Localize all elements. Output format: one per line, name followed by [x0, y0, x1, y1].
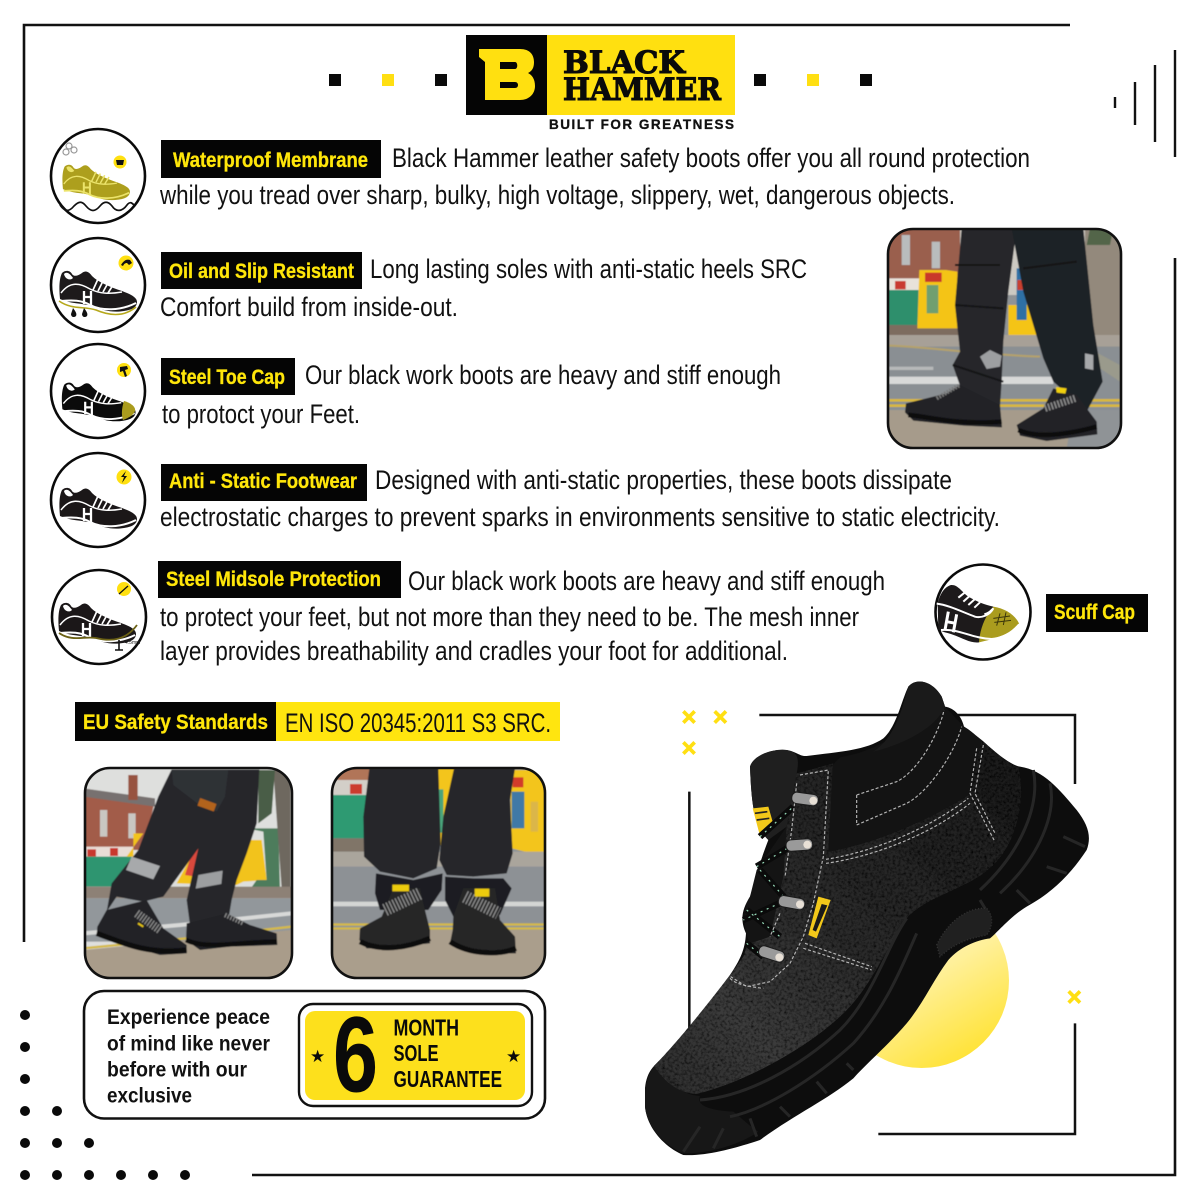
guarantee message: of mind like never: [107, 1032, 271, 1056]
guarantee panel: [84, 991, 545, 1118]
icon: steel toe shoe: [51, 344, 145, 438]
guarantee message: Experience peace: [107, 1005, 270, 1029]
product photo: black safety boot: [645, 681, 1089, 1155]
logo: Black Hammer: BLACK: [563, 45, 686, 81]
description: [160, 254, 807, 322]
label: [161, 140, 381, 178]
icon: scuff cap shoe: [936, 564, 1030, 660]
header squares: [329, 74, 872, 86]
icon: steel midsole shoe: 4.5mm: [125, 640, 140, 646]
boot frame lines: [689, 715, 1075, 1134]
description: electrostatic charges to prevent sparks in environments sensitive to static electricity.: [160, 502, 1000, 532]
description: [160, 566, 885, 666]
EU safety standards banner: EU Safety Standards: [83, 711, 268, 734]
photo: worker legs and boots, top right: [887, 228, 1123, 452]
EU safety standards banner: EN ISO 20345:2011 S3 SRC.: [285, 708, 551, 738]
badge: 6 month sole guarantee: MONTH: [394, 1014, 459, 1040]
badge: 6 month sole guarantee: SOLE: [394, 1040, 438, 1066]
badge: 6 month sole guarantee: ★: [506, 1047, 521, 1067]
label: Oil and Slip Resistant: [169, 260, 354, 283]
label: Scuff Cap: [1054, 601, 1135, 624]
logo: Black Hammer: [466, 35, 735, 132]
description: Long lasting soles with anti-static heels SRC: [370, 254, 807, 284]
badge: 6 month sole guarantee: [299, 994, 532, 1114]
photo: front view of boots: [330, 765, 547, 982]
EU safety standards banner: [75, 702, 560, 741]
description: Our black work boots are heavy and stiff enough: [305, 360, 781, 390]
feature: Steel Toe Cap: [51, 344, 781, 438]
description: [159, 143, 1030, 210]
description: Designed with anti-static properties, these boots dissipate: [375, 465, 952, 495]
description: Black Hammer leather safety boots offer you all round protection: [392, 143, 1030, 173]
guarantee message: [107, 1005, 271, 1108]
badge: 6 month sole guarantee: ★: [310, 1047, 325, 1067]
description: to protoct your Feet.: [162, 399, 360, 429]
logo mark: B: [479, 49, 535, 100]
description: Our black work boots are heavy and stiff enough: [408, 566, 885, 596]
description: Comfort build from inside-out.: [160, 292, 458, 322]
label: [1046, 594, 1148, 632]
yellow cross marks: [683, 711, 1080, 1003]
yellow circle: [834, 893, 1009, 1068]
icon: waterproof shoe: [51, 129, 145, 223]
badge: 6 month sole guarantee: GUARANTEE: [394, 1066, 502, 1092]
description: layer provides breathability and cradles your foot for additional.: [160, 636, 788, 666]
icon: steel midsole shoe: [52, 570, 146, 664]
label: Waterproof Membrane: [173, 149, 368, 172]
icon: anti-static shoe: [51, 453, 145, 547]
decorative dot grid: [20, 1010, 190, 1180]
guarantee message: exclusive: [107, 1084, 192, 1108]
label: Steel Midsole Protection: [166, 568, 381, 591]
logo: Black Hammer: BUILT FOR GREATNESS: [549, 117, 734, 132]
feature: Oil and Slip Resistant: [51, 238, 807, 332]
description: while you tread over sharp, bulky, high voltage, slippery, wet, dangerous objects.: [159, 180, 955, 210]
decorative vertical bars: [1115, 50, 1175, 157]
description: to protect your feet, but not more than they need to be. The mesh inner: [160, 602, 859, 632]
feature: Steel Midsole Protection: [52, 561, 885, 666]
logo: Black Hammer: HAMMER: [563, 72, 721, 108]
label: Steel Toe Cap: [169, 366, 285, 389]
guarantee message: before with our: [107, 1058, 248, 1082]
feature: Scuff Cap: [936, 564, 1148, 660]
label: [158, 561, 401, 598]
label: [161, 464, 367, 501]
label: Anti - Static Footwear: [169, 470, 357, 493]
label: [161, 358, 295, 395]
description: [162, 360, 781, 429]
feature: Waterproof Membrane: [51, 129, 1030, 223]
icon: oil resistant shoe: [51, 238, 145, 332]
photo: side view of boots: [83, 765, 297, 982]
feature: Anti-Static Footwear: [51, 453, 1000, 547]
badge: 6 month sole guarantee: 6: [333, 994, 378, 1114]
label: [161, 252, 362, 289]
description: [160, 465, 1000, 532]
boot hero with frame and accents: [645, 681, 1089, 1155]
